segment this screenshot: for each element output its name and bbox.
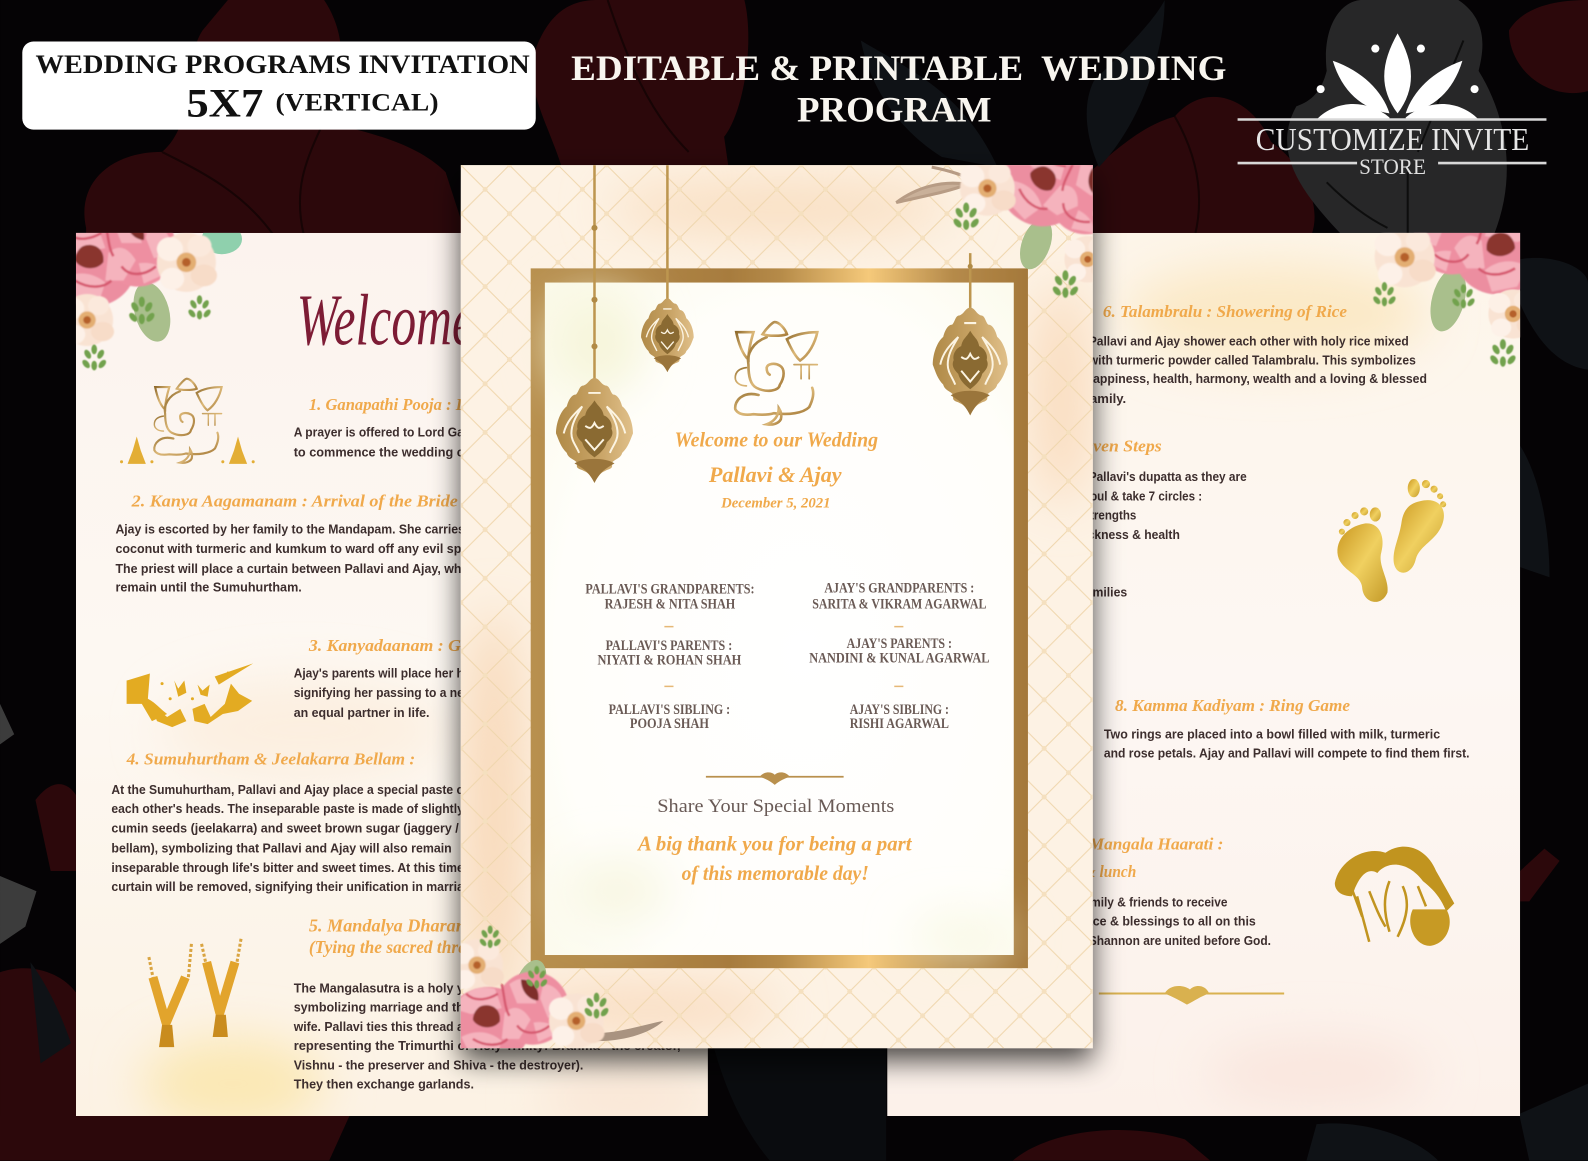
text: left sheet sections: wife. Pallavi ties this thread a (293, 1020, 465, 1034)
text: bride family names: PALLAVI'S GRANDPARENTS: (585, 580, 755, 597)
text: right sheet sections: soul & take 7 circles : (1084, 489, 1202, 503)
text: left sheet sections (111, 395, 681, 1092)
heading (571, 48, 1226, 130)
heading: EDITABLE & PRINTABLE WEDDING (571, 48, 1226, 88)
text: bride family names: PALLAVI'S SIBLING : (609, 701, 730, 718)
icon: couple with golden pot (1335, 847, 1454, 946)
text: left sheet sections: signifying her passing to a ne (294, 686, 464, 700)
text: left sheet sections: The priest will place a curtain between Pallavi and Ajay, whi (115, 562, 465, 576)
text: right sheet sections: & lunch (1084, 862, 1136, 881)
heading: PROGRAM (797, 90, 991, 130)
divider: right sheet ornament (1099, 986, 1284, 1005)
florals: top-right corner (1372, 232, 1520, 368)
text: left sheet sections: bellam), symbolizing that Pallavi and Ajay will also remain (111, 842, 452, 856)
label: wedding programs invitation (22, 42, 536, 130)
text: bride family names (585, 580, 755, 732)
text: left sheet sections: A prayer is offered to Lord Ga (294, 425, 465, 439)
divider ornament (706, 772, 844, 785)
text: groom family names: AJAY'S PARENTS : (847, 635, 952, 652)
logo: customize invite store (1238, 33, 1546, 179)
text: left sheet sections: symbolizing marriage and th (294, 1001, 464, 1015)
text: right sheet sections: Pallavi's dupatta as they are (1089, 470, 1247, 484)
text: right sheet sections: 6. Talambralu : Showering of Rice (1103, 302, 1347, 321)
text: thank you note (636, 832, 913, 885)
icon: ganesh (735, 322, 817, 425)
inner card (545, 283, 1014, 955)
text: thank you note: A big thank you for being a part (636, 832, 913, 856)
text: left sheet sections: 3. Kanyadaanam : Gi (308, 636, 466, 655)
text: right sheet sections: sickness & health (1078, 528, 1180, 542)
logo: customize invite store: CUSTOMIZE INVITE (1256, 122, 1529, 157)
florals: top-left corner (76, 232, 242, 371)
text: welcome block (674, 428, 878, 511)
text: groom family names: AJAY'S SIBLING : (850, 701, 949, 718)
petal detail lines (162, 0, 1199, 235)
text: bride family names: POOJA SHAH (630, 715, 709, 732)
panel: center invitation card (446, 118, 1137, 1064)
text: right sheet sections: Shannon are united before God. (1089, 934, 1271, 948)
text: right sheet sections: grace & blessings to all on this (1074, 915, 1256, 929)
text: left sheet sections: representing the Trimurthi or Holy Trinity: Brahma - the creator, (294, 1039, 681, 1053)
text: right sheet sections: Seven Steps (1076, 437, 1162, 456)
text: left sheet sections: At the Sumuhurtham, Pallavi and Ajay place a special paste o (111, 783, 464, 797)
watercolor wash (1124, 263, 1428, 1109)
label: wedding programs invitation: 5X7 (186, 80, 263, 125)
panel: right sheet (887, 197, 1543, 1116)
text: left sheet sections: Vishnu - the preserver and Shiva - the destroyer). (294, 1058, 583, 1072)
text: left sheet sections: 2. Kanya Aagamanam : Arrival of the Bride (131, 491, 458, 510)
logo: customize invite store: STORE (1359, 154, 1426, 179)
icon: mangalsutra garlands (149, 939, 241, 1047)
text: right sheet sections: 8. Kamma Kadiyam : Ring Game (1115, 696, 1350, 715)
icon: golden footprints (1337, 479, 1446, 602)
text: right sheet sections: family & friends to receive (1080, 895, 1227, 909)
text: left sheet sections: an equal partner in life. (294, 706, 429, 720)
text: right sheet sections: with turmeric powder called Talambralu. This symbolizes (1088, 354, 1416, 368)
icon: ganesh with lamps (120, 379, 255, 464)
text: left sheet sections: Ajay's parents will place her h (294, 667, 464, 681)
grey flower (1287, 0, 1507, 235)
text: left sheet sections: remain until the Sumuhurtham. (115, 580, 302, 594)
icon: lotus (1317, 33, 1479, 120)
text: left sheet sections: The Mangalasutra is a holy y (294, 981, 464, 995)
text: bride family names: NIYATI & ROHAN SHAH (598, 651, 741, 668)
text: bride family names: PALLAVI'S PARENTS : (606, 637, 732, 654)
pendants: hanging damask ornaments (556, 165, 1008, 483)
text: left sheet sections: coconut with turmeric and kumkum to ward off any evil spi (115, 542, 465, 556)
text: right sheet sections: Mangala Haarati : (1088, 835, 1223, 854)
icon: joined hands (127, 663, 253, 727)
text: left sheet sections: 5. Mandalya Dharan (309, 916, 466, 936)
text: right sheet sections: families (1082, 586, 1127, 600)
text: groom family names: AJAY'S GRANDPARENTS : (824, 579, 974, 596)
text: right sheet sections: strengths (1084, 509, 1136, 523)
watercolor wash (142, 679, 719, 1129)
text: right sheet sections: family. (1086, 392, 1126, 406)
text: left sheet sections: curtain will be removed, signifying their unification in marria (111, 880, 465, 894)
text: right sheet sections: and rose petals. Ajay and Pallavi will compete to find them first. (1104, 747, 1469, 761)
text: left sheet sections: inseparable through life's bitter and sweet times. At this time (111, 861, 464, 875)
text: right sheet sections: happiness, health, harmony, wealth and a loving & blessed (1086, 372, 1427, 386)
text: groom family names (809, 579, 989, 732)
text: share your special moments: Share Your Special Moments (657, 796, 894, 817)
text: groom family names: SARITA & VIKRAM AGARWAL (812, 596, 986, 613)
text: left sheet sections: 1. Ganapathi Pooja : L (309, 395, 466, 414)
gold frame (531, 268, 1028, 968)
text: right sheet sections: Pallavi and Ajay shower each other with holy rice mixed (1089, 334, 1409, 348)
text: left sheet sections: Ajay is escorted by her family to the Mandapam. She carries (115, 523, 465, 537)
text: thank you note: of this memorable day! (682, 861, 869, 885)
text: welcome block: Welcome to our Wedding (674, 428, 878, 452)
text: right sheet sections: Two rings are placed into a bowl filled with milk, turmeric (1104, 727, 1440, 741)
text: left sheet sections: each other's heads. The inseparable paste is made of slightly (111, 802, 464, 816)
text: right sheet sections (1074, 302, 1469, 948)
label: wedding programs invitation: WEDDING PROGRAMS INVITATION (35, 50, 530, 79)
grey petals (0, 704, 36, 944)
text: groom family names: RISHI AGARWAL (850, 715, 949, 732)
text: left sheet sections: to commence the wedding c (294, 446, 464, 460)
panel: left sheet (47, 210, 719, 1129)
text: bride family names: RAJESH & NITA SHAH (605, 596, 735, 613)
text: welcome block: Pallavi & Ajay (708, 462, 842, 487)
text: left sheet sections: They then exchange garlands. (294, 1078, 474, 1092)
label: wedding programs invitation: (VERTICAL) (275, 88, 439, 116)
bottom-left florals (460, 925, 664, 1048)
top-right florals (896, 165, 1093, 298)
text: left sheet sections: 4. Sumuhurtham & Jeelakarra Bellam : (126, 750, 415, 769)
text: left sheet sections: cumin seeds (jeelakarra) and sweet brown sugar (jaggery / (111, 821, 459, 835)
text: left sheet sections: (Tying the sacred thre (309, 937, 466, 958)
script title: Welcome: Welcome (297, 279, 474, 360)
text: groom family names: NANDINI & KUNAL AGARWAL (809, 649, 989, 666)
text: welcome block: December 5, 2021 (720, 494, 830, 511)
